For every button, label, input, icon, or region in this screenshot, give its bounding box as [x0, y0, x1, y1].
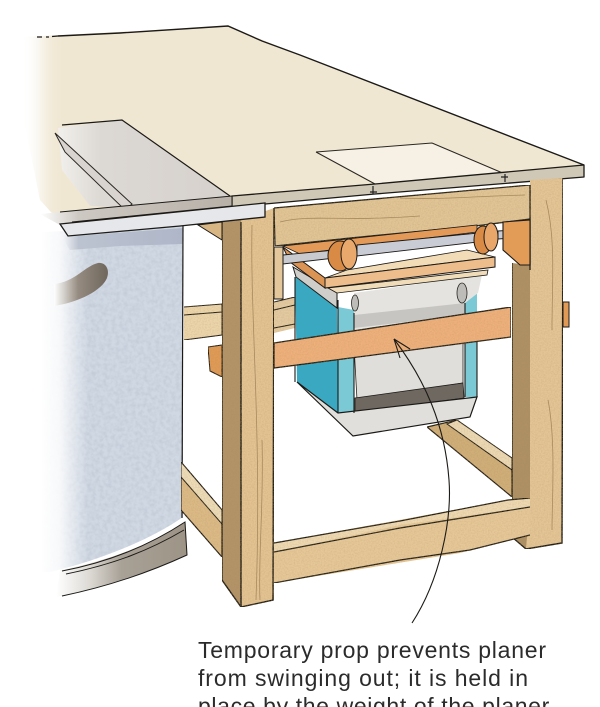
planer left teal face	[295, 277, 338, 413]
hinge assembly	[274, 220, 530, 299]
right leg	[512, 178, 563, 549]
right prop end	[563, 302, 569, 327]
planer dark slot	[355, 383, 464, 413]
arrow: leader to prop	[394, 339, 449, 623]
rear cross rail	[184, 297, 295, 340]
rip fence	[60, 203, 265, 236]
icon: drum handle hole	[54, 263, 108, 306]
left collar	[328, 241, 352, 271]
saw table wing	[40, 120, 232, 225]
caption text: Temporary prop prevents planer	[198, 637, 546, 663]
drum base ring	[56, 522, 187, 597]
planer base	[297, 382, 477, 436]
platen board	[325, 250, 495, 278]
left hanger post	[274, 247, 283, 299]
planer front teal strips	[338, 293, 477, 413]
planer top skirt	[293, 267, 337, 308]
right collar	[474, 226, 492, 254]
diagonal brace under fence	[198, 222, 222, 240]
caption text: from swinging out; it is held in	[198, 665, 528, 691]
dust collector drum	[40, 226, 187, 597]
right bracket	[503, 220, 530, 265]
lower front rail	[274, 498, 530, 583]
table top	[0, 18, 584, 258]
temporary prop	[208, 307, 511, 377]
rear diagonal rail right	[427, 420, 512, 497]
planer	[293, 267, 482, 436]
caption text	[198, 637, 555, 707]
steel rod	[283, 250, 335, 264]
apron	[274, 185, 530, 246]
front leg	[222, 208, 274, 607]
planer front gray panels	[354, 275, 482, 360]
lower left diagonal rail	[181, 462, 222, 557]
back board strip	[283, 225, 477, 254]
